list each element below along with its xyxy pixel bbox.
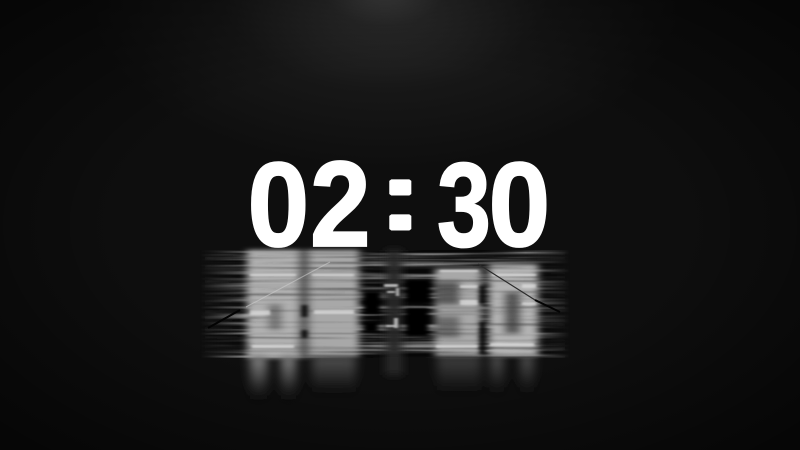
colon: : <box>379 142 422 249</box>
wet floor streaks <box>200 250 570 358</box>
reflection tails <box>250 250 534 404</box>
digit 0: 0 <box>248 138 309 272</box>
colon reflection speckles <box>384 284 399 328</box>
digit 3: 3 <box>437 138 491 272</box>
timer digits <box>248 135 550 272</box>
digit 2: 2 <box>310 135 371 272</box>
countdown scene <box>202 0 568 395</box>
bright horizontal glints <box>250 270 536 348</box>
gaps between reflected digits <box>302 280 485 354</box>
floor crack lines <box>208 262 560 328</box>
digit 0: 0 <box>488 138 550 272</box>
floor reflection of the timer <box>200 250 570 404</box>
reflected digit glow <box>247 250 538 358</box>
dark streaks across reflection <box>205 250 565 358</box>
